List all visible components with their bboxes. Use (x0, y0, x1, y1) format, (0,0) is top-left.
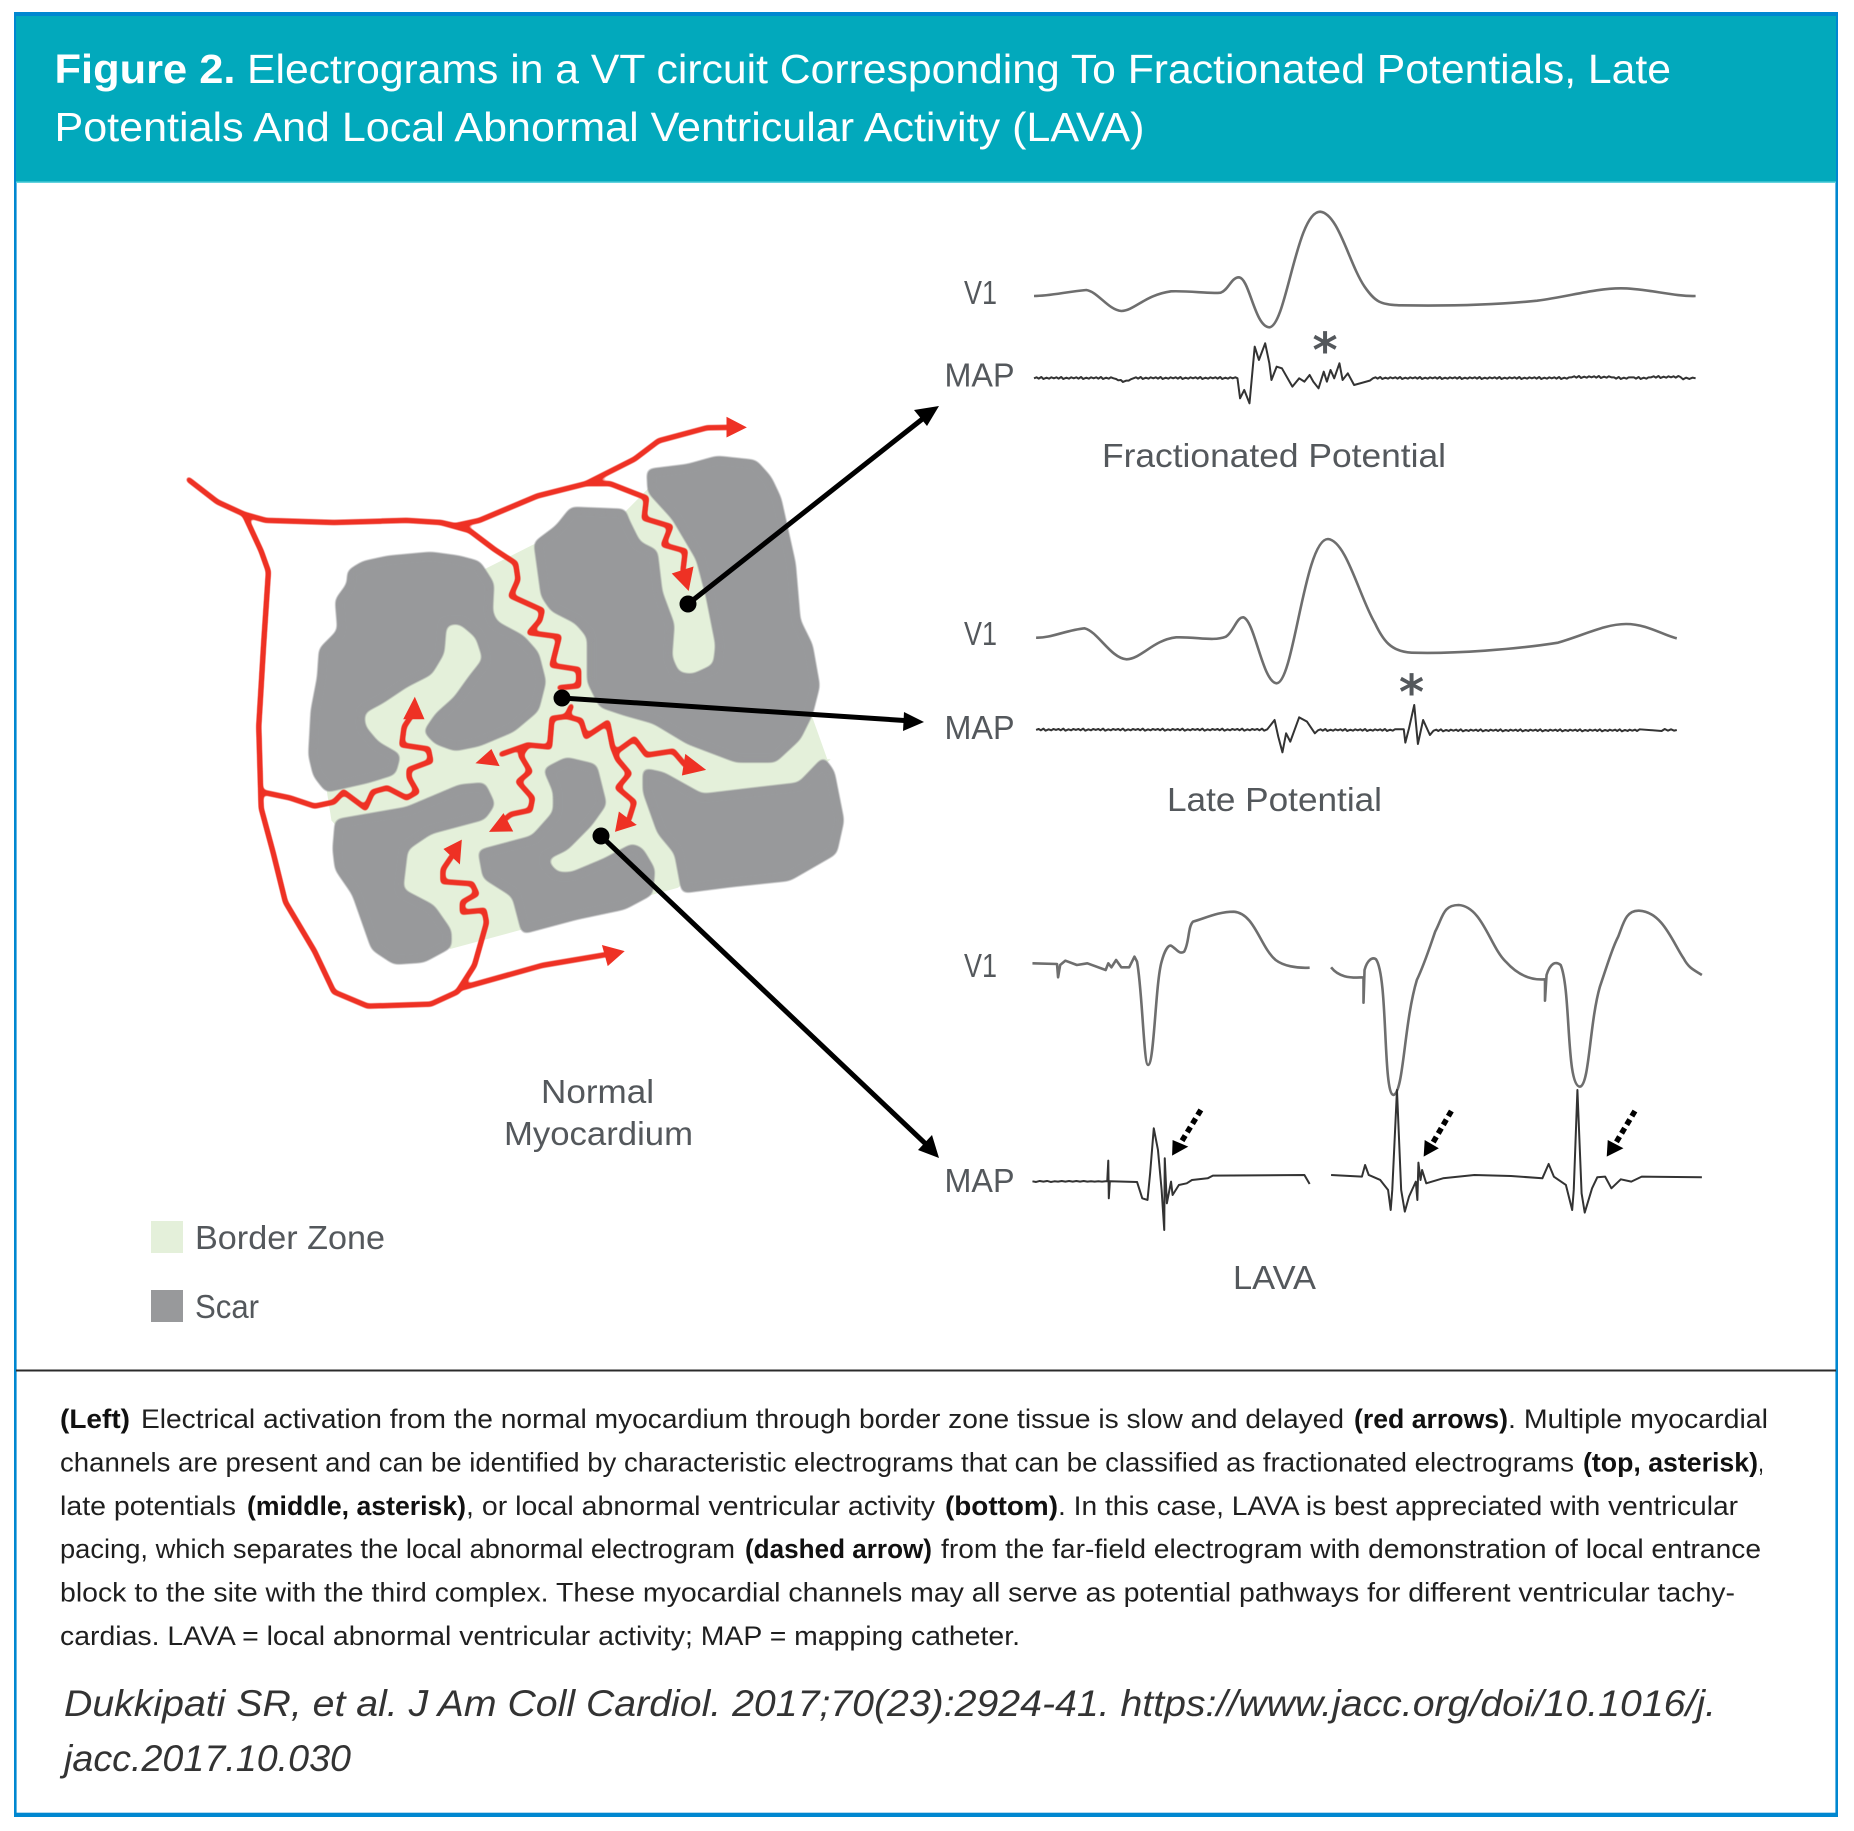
trace caption: Fractionated Potential (1102, 437, 1446, 474)
citation (59, 1683, 1716, 1779)
caption text block: late potentials (60, 1491, 236, 1521)
red arrowheads (403, 417, 747, 966)
title (54, 46, 1671, 150)
dashed arrow 1 (1172, 1110, 1201, 1156)
asterisk: * (1399, 665, 1424, 721)
citation: jacc.2017.10.030 (59, 1738, 351, 1779)
caption text block: , (1758, 1448, 1764, 1478)
V1 and MAP traces (1036, 539, 1677, 752)
label: normal myocardium: Normal (541, 1073, 654, 1110)
header banner (16, 16, 1836, 183)
lead labels: V1 (964, 615, 997, 652)
caption text block: . In this case, LAVA is best appreciated with ventricular (1058, 1491, 1738, 1521)
lead labels: MAP (944, 709, 1014, 746)
caption text block: (top, asterisk) (1583, 1448, 1758, 1478)
scar regions (310, 457, 843, 963)
title: Electrograms in a VT circuit Corresponding To Fractionated Potentials, Late (247, 46, 1671, 92)
V1 and MAP traces (1034, 212, 1696, 403)
scar region: lower left (334, 784, 494, 963)
trace caption: LAVA (1233, 1259, 1316, 1296)
caption text block: (middle, asterisk) (247, 1491, 466, 1521)
lead labels: V1 (964, 947, 997, 984)
title: Figure 2. (54, 46, 236, 92)
caption text block: . Multiple myocardial (1508, 1404, 1768, 1434)
caption text block: (red arrows) (1354, 1404, 1508, 1434)
caption text block: (bottom) (945, 1491, 1058, 1521)
V1 and MAP traces with dashed arrows (1032, 905, 1702, 1230)
left diagram: scar, border zone, activation (188, 417, 843, 1006)
legend (151, 1219, 385, 1325)
panel: fractionated potential (944, 212, 1696, 474)
scar region: upper left (310, 553, 545, 791)
caption text block: from the far-field electrogram with demonstration of local entrance (941, 1534, 1761, 1564)
caption text block: channels are present and can be identified by characteristic electrograms that can be classified as fractionated electrograms (60, 1448, 1574, 1478)
lead labels: MAP (944, 356, 1014, 394)
legend item: border zone: Border Zone (195, 1219, 385, 1256)
lead labels: V1 (964, 274, 997, 311)
caption text block: (dashed arrow) (745, 1534, 932, 1564)
legend item: scar: Scar (195, 1288, 259, 1325)
scar region: lower right (644, 758, 843, 892)
lead labels (944, 274, 1014, 394)
trace caption: Late Potential (1167, 781, 1382, 818)
red activation arrows (188, 417, 747, 1006)
caption text block: cardias. LAVA = local abnormal ventricular activity; MAP = mapping catheter. (60, 1621, 1020, 1651)
lead labels (944, 615, 1014, 746)
black pointer arrow: LAVA (592, 828, 939, 1158)
caption text block: , or local abnormal ventricular activity (466, 1491, 936, 1521)
caption text block: block to the site with the third complex. These myocardial channels may all serve as potential pathways for different ventricular tachy- (60, 1578, 1735, 1608)
panel: late potential (944, 539, 1677, 818)
legend item: scar (151, 1288, 259, 1325)
citation: Dukkipati SR, et al. J Am Coll Cardiol. 2017;70(23):2924-41. https://www.jacc.org/doi/10.1016/j. (64, 1683, 1716, 1724)
black pointer arrow: late potential (554, 690, 924, 731)
lead labels: MAP (944, 1162, 1014, 1199)
lead labels (944, 947, 1014, 1199)
title: Potentials And Local Abnormal Ventricular Activity (LAVA) (54, 104, 1144, 150)
border zone tissue (327, 488, 831, 949)
black pointer arrow: fractionated potential (680, 406, 939, 612)
asterisk: * (1312, 323, 1338, 379)
red pathways (188, 427, 731, 1006)
panel: LAVA (944, 905, 1702, 1296)
caption text block: Electrical activation from the normal myocardium through border zone tissue is slow and delayed (141, 1404, 1344, 1434)
scar region: lower centre (479, 758, 654, 933)
label: normal myocardium (504, 1073, 693, 1152)
dashed arrow 2 (1424, 1111, 1451, 1157)
label: normal myocardium: Myocardium (504, 1115, 693, 1152)
caption text block: pacing, which separates the local abnormal electrogram (60, 1534, 735, 1564)
dashed arrow 3 (1607, 1111, 1635, 1157)
scar region: upper right (535, 457, 819, 761)
caption text block (60, 1404, 1768, 1651)
caption text block: (Left) (60, 1404, 130, 1434)
